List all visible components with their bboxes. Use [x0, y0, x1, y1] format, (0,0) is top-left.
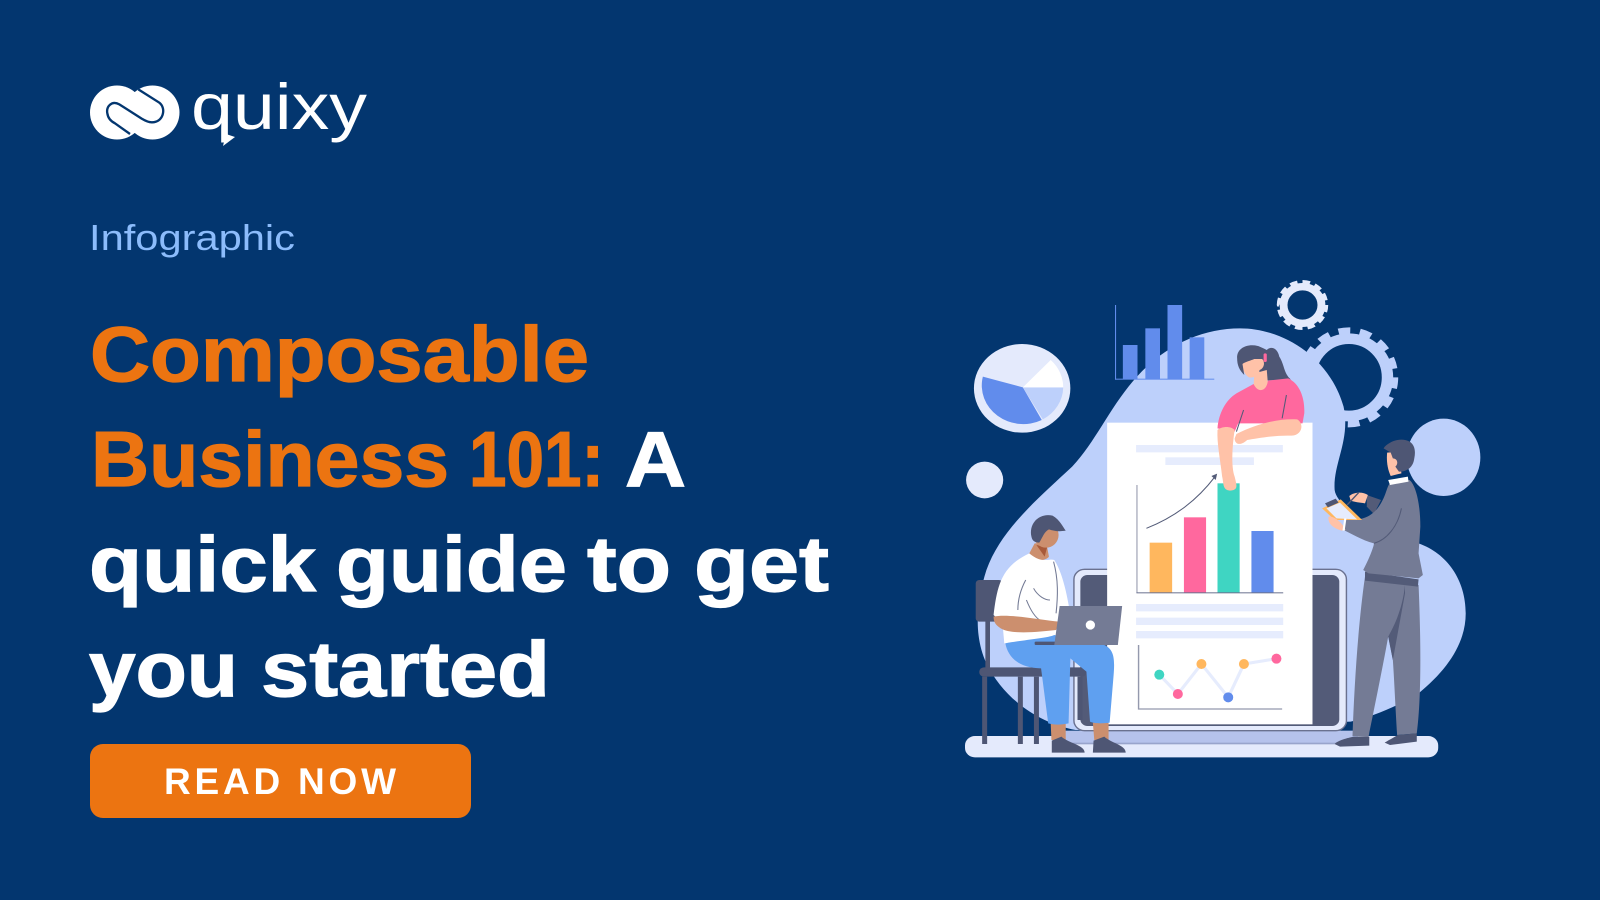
bar chart top [1115, 305, 1214, 380]
heading lines [1136, 445, 1283, 465]
label: Infographic: Infographic [89, 217, 295, 258]
title: get [694, 520, 829, 608]
chair [976, 580, 1086, 744]
text lines [1136, 604, 1283, 638]
tablet [1074, 569, 1346, 731]
pie chart [974, 344, 1070, 433]
arrow: growth [1146, 474, 1217, 528]
laptop [1035, 606, 1122, 645]
decorative circle right [1407, 419, 1480, 496]
bar chart [1136, 483, 1283, 593]
illustration [965, 282, 1480, 757]
icon: large gear [1304, 331, 1394, 424]
person: standing man [1322, 440, 1423, 747]
button: read now: READ NOW [164, 761, 396, 802]
person: seated man [976, 515, 1126, 753]
title: quick [89, 520, 317, 608]
wordmark: quixy [191, 70, 368, 143]
title: you [89, 625, 238, 713]
background blob [978, 328, 1466, 730]
title: A [625, 415, 686, 503]
title: to [587, 520, 671, 608]
button: read now [90, 744, 471, 818]
title: Composable [90, 310, 589, 398]
logo: quixy [90, 70, 368, 146]
icon: infinity mark [90, 86, 180, 140]
icon: small gear [1279, 282, 1326, 328]
person: woman [1217, 345, 1304, 491]
title [89, 310, 829, 713]
decorative circle left [966, 462, 1003, 498]
title: started [261, 625, 550, 713]
document panel [1107, 423, 1312, 725]
title: 101: [469, 415, 604, 503]
line chart [1139, 645, 1282, 709]
title: Business [91, 415, 449, 503]
clipboard [1322, 499, 1362, 520]
title: guide [336, 520, 567, 608]
floor [965, 736, 1438, 757]
tablet base [1065, 731, 1358, 744]
